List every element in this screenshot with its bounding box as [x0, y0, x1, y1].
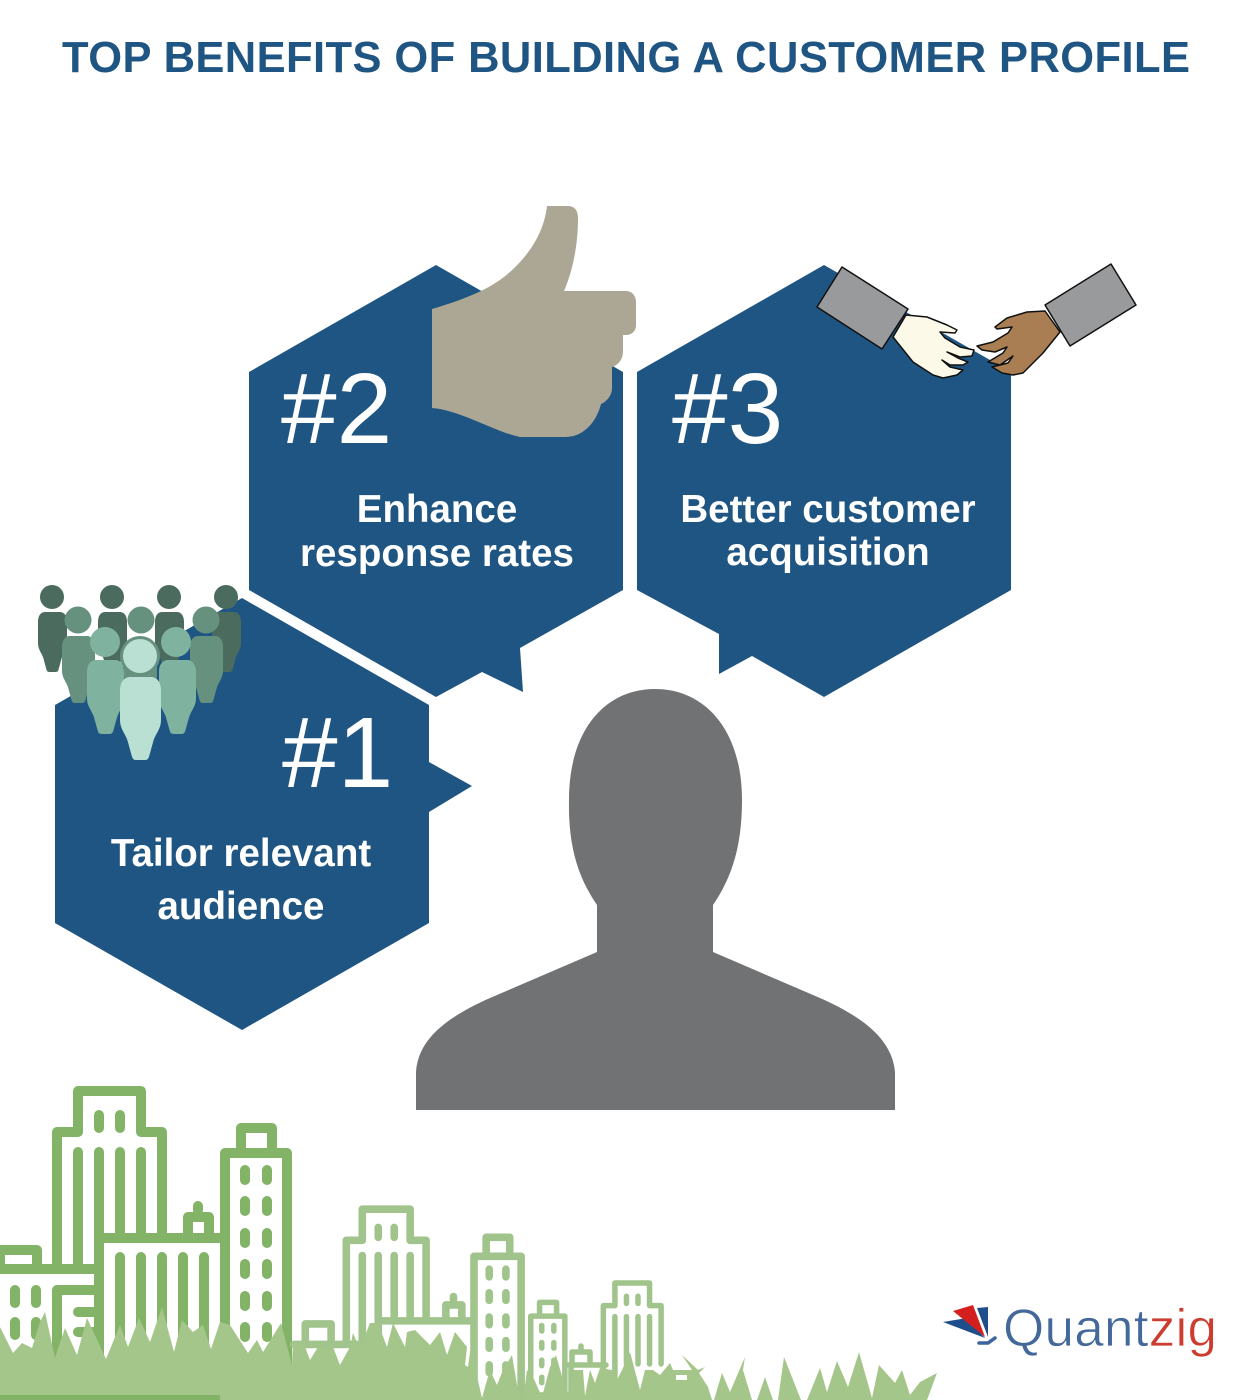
- hexagon 3 shape: [637, 265, 1011, 697]
- label: enhance response rates: response rates: [300, 532, 574, 575]
- label: enhance response rates: Enhance: [357, 488, 517, 531]
- panel: hexagon 2: [249, 206, 636, 697]
- label: tailor relevant audience: Tailor relevant: [111, 832, 371, 875]
- logo mark: [943, 1305, 995, 1343]
- panel: hexagon 1: [38, 585, 472, 1030]
- silhouette: customer profile: [416, 689, 895, 1110]
- label: better customer acquisition: acquisition: [726, 531, 930, 574]
- city skyline: [0, 1091, 937, 1400]
- ground strip: [0, 1395, 220, 1400]
- building group: middle: [294, 1209, 521, 1400]
- hexagon 1 shape: [55, 598, 472, 1030]
- number 2: #2: [281, 353, 392, 465]
- logo wordmark: Quantzig: [1003, 1299, 1217, 1358]
- panel: hexagon 3: [637, 264, 1136, 697]
- grass gap: [676, 1375, 687, 1380]
- title: TOP BENEFITS OF BUILDING A CUSTOMER PROFILE: [62, 34, 1190, 82]
- icon: handshake: [817, 264, 1136, 378]
- grass: [0, 1307, 937, 1400]
- building group: far right: [531, 1283, 661, 1400]
- building group: foreground left: [0, 1091, 287, 1400]
- label: better customer acquisition: Better customer: [680, 488, 976, 531]
- number 1: #1: [282, 697, 393, 809]
- icon: thumbs up: [432, 206, 636, 437]
- icon: group of people: [38, 585, 241, 760]
- logo: Quantzig: [943, 1299, 1217, 1358]
- number 3: #3: [672, 353, 783, 465]
- hexagon 2 shape: [249, 265, 623, 697]
- label: tailor relevant audience: audience: [158, 885, 324, 928]
